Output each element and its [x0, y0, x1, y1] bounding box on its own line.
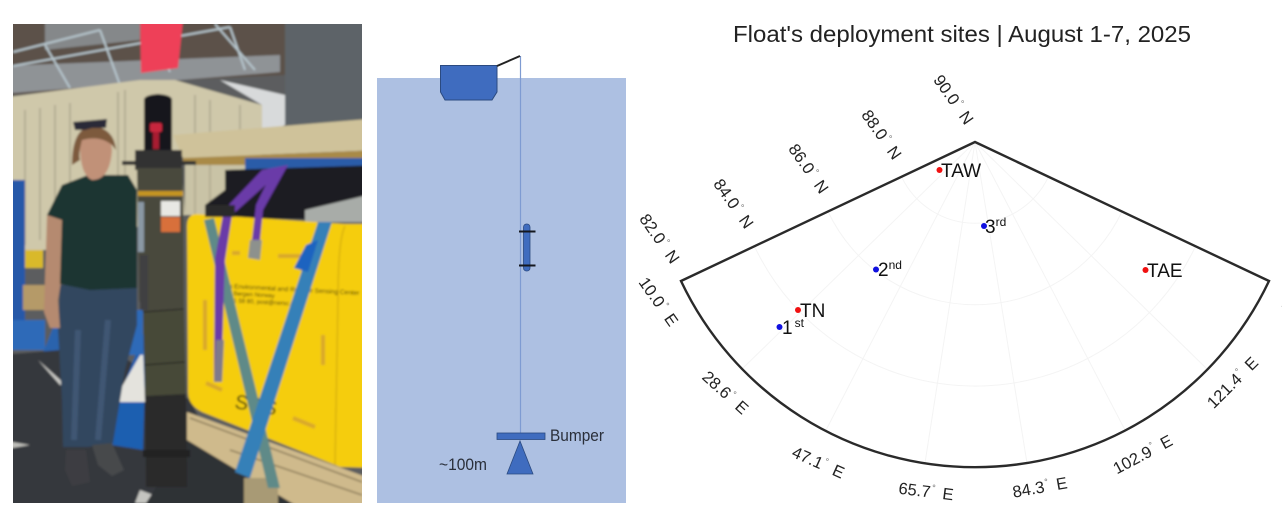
latitude labels: °	[811, 167, 821, 176]
yellow box on pallet	[185, 410, 362, 503]
longitude labels: °	[1233, 366, 1243, 376]
profiling float	[519, 224, 536, 271]
longitude labels: °	[729, 389, 739, 399]
deployment: 1st	[776, 316, 805, 339]
latitude labels: °	[736, 202, 746, 211]
longitude labels: 84.3	[1011, 478, 1046, 502]
panel: photo of woman with float: SOS	[233, 391, 279, 420]
ground	[13, 349, 198, 503]
longitude labels: E	[1153, 432, 1176, 455]
longitude labels: E	[1050, 474, 1069, 495]
deployment: 3rd	[981, 215, 1006, 238]
deployment: 3rd: 3	[985, 217, 996, 238]
longitude labels	[635, 265, 1282, 504]
anchor	[507, 441, 533, 474]
longitude labels: 10.0	[635, 274, 668, 311]
deployment: 2nd: nd	[889, 258, 902, 272]
longitude labels: E	[728, 394, 752, 418]
longitude labels: °	[661, 301, 672, 310]
crate	[112, 330, 145, 450]
woman	[58, 285, 137, 447]
chart: polar deployment map	[635, 71, 1282, 504]
deployment: 3rd: rd	[996, 215, 1006, 229]
map outline	[681, 142, 1269, 467]
longitude labels: 121.4	[1204, 370, 1246, 412]
surface buoy	[440, 66, 497, 100]
latitude labels: N	[658, 243, 682, 267]
longitude labels: °	[931, 483, 937, 493]
longitude labels: °	[823, 456, 831, 467]
mooring line	[520, 56, 522, 434]
left blue frame and yard	[13, 178, 27, 321]
latitude labels: 86.0	[785, 141, 818, 177]
buoy arm	[497, 56, 520, 66]
latitude labels: °	[956, 98, 966, 107]
longitude labels: 102.9	[1110, 443, 1155, 478]
panel: mooring diagram	[377, 56, 626, 503]
latitude labels: °	[662, 237, 672, 246]
deployment: 2nd: 2	[878, 260, 889, 281]
panel: photo of woman with float: 07 Bergen Norway	[225, 291, 275, 300]
latitude labels: N	[807, 173, 831, 197]
longitude labels: E	[658, 307, 681, 330]
label: depth: ~100m	[439, 456, 487, 474]
latitude labels: 88.0	[858, 107, 891, 143]
longitude labels: 65.7	[897, 480, 932, 501]
float instrument	[144, 94, 172, 150]
latitude labels: N	[880, 139, 904, 163]
panel: photo of woman with float: 5 21 58 80, post@nersc.no	[225, 298, 298, 308]
red flag	[138, 24, 184, 74]
latitude labels	[636, 71, 977, 267]
latitude labels: 82.0	[636, 211, 669, 247]
label: bumper: Bumper	[550, 427, 604, 445]
dark equipment	[245, 158, 380, 170]
bumper	[497, 433, 545, 440]
deployment: 1st: 1	[782, 318, 793, 339]
deployment: 2nd	[873, 258, 902, 281]
title: Float's deployment sites | August 1-7, 2025	[733, 21, 1191, 47]
longitude labels: 47.1	[789, 444, 826, 473]
latitude labels: N	[952, 104, 976, 128]
longitude labels: °	[1044, 477, 1049, 487]
latitude labels: 84.0	[710, 176, 743, 212]
panel: photo of woman with float	[13, 24, 362, 503]
straps	[204, 218, 280, 488]
box lettering: en Environmental and Remote Sensing Center	[225, 283, 360, 297]
longitude labels: E	[1238, 354, 1262, 378]
latitude labels: 90.0	[930, 72, 963, 108]
longitude labels: E	[825, 460, 847, 482]
longitude labels: °	[1147, 440, 1155, 450]
longitude labels: 28.6	[698, 368, 734, 403]
latitude labels: N	[732, 208, 756, 232]
site: TAW: TAW	[941, 161, 981, 182]
site: TAE: TAE	[1147, 261, 1183, 282]
grid arcs	[742, 142, 1207, 463]
site: TN: TN	[800, 301, 825, 322]
deployment: 1st: st	[795, 316, 805, 330]
wooden beam	[173, 118, 380, 158]
longitude labels: E	[937, 485, 955, 504]
latitude labels: °	[884, 133, 894, 142]
